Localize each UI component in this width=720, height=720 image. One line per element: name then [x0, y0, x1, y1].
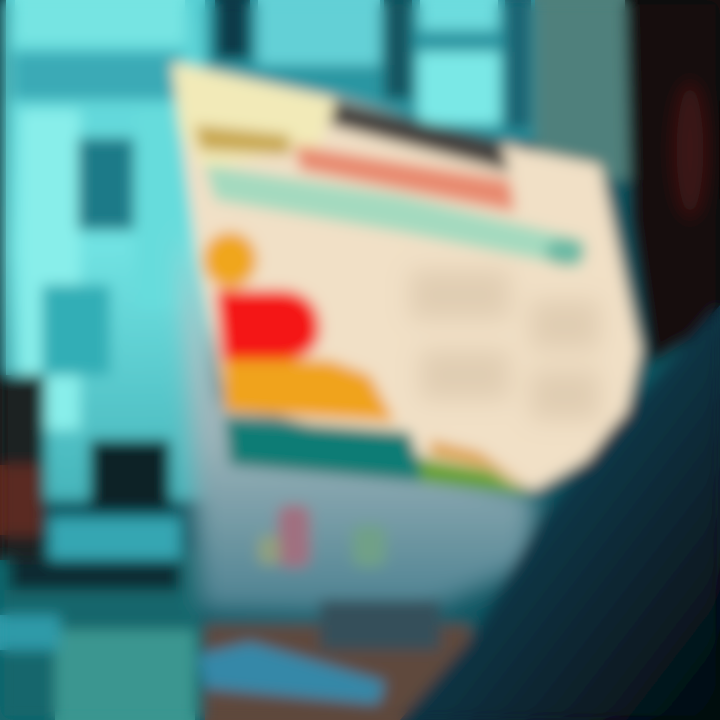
spreadsheet: faint table cells — [410, 270, 600, 420]
window: upper panes and frames — [205, 0, 630, 180]
spreadsheet: header tag — [195, 125, 290, 155]
person: head — [625, 0, 720, 365]
spreadsheet: salmon header band — [295, 145, 515, 212]
person: shoulder — [400, 305, 720, 720]
chart bar: red — [216, 290, 320, 360]
chart bar: green — [420, 458, 532, 495]
desk and lower left objects — [0, 375, 200, 720]
chart bar: orange middle — [222, 358, 395, 422]
chart bar: orange top — [203, 232, 257, 288]
monitor body — [180, 230, 535, 615]
window: dark teal panels — [42, 138, 134, 375]
monitor stand and keyboard — [198, 600, 470, 720]
chart: stepped colour bars — [203, 232, 532, 495]
monitor icons: blurred marks — [258, 505, 386, 567]
spreadsheet: dark title bar — [330, 100, 510, 172]
window: left panes — [0, 0, 210, 500]
spreadsheet: paper sheet — [172, 62, 640, 490]
chart bar: amber tip — [430, 440, 530, 488]
chart bar: teal — [225, 418, 425, 482]
spreadsheet: mint header band — [205, 165, 585, 268]
